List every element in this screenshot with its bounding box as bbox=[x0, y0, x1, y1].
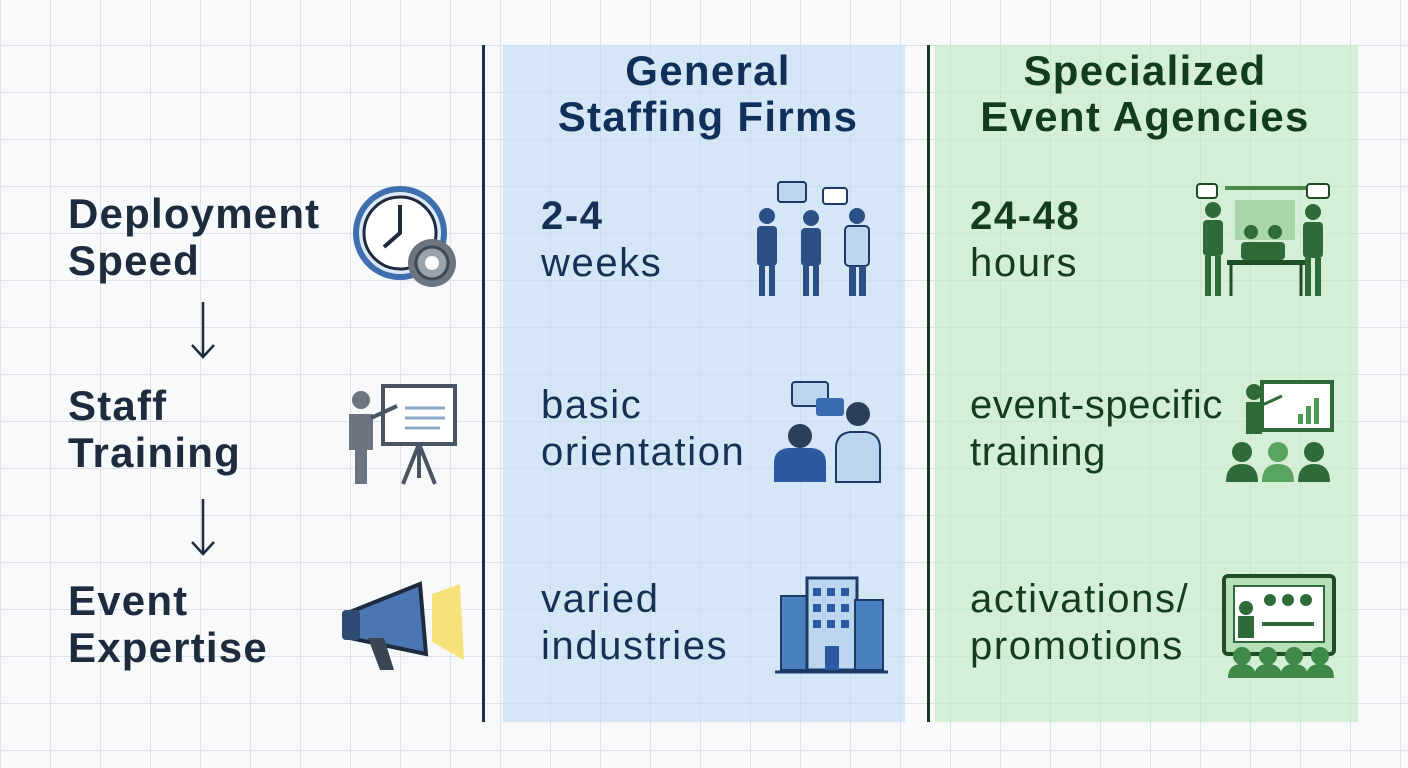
value: varied industries bbox=[541, 577, 728, 668]
icon: training presentation bbox=[1226, 380, 1334, 482]
panel: specialized agencies bbox=[935, 45, 1358, 722]
arrow 1 bbox=[191, 302, 215, 359]
value: 2-4 weeks: 2-4 bbox=[541, 194, 604, 238]
label: staff training: Training bbox=[68, 429, 241, 476]
value: activations/promotions bbox=[970, 577, 1189, 668]
value: varied industries: industries bbox=[541, 624, 728, 668]
value: basic orientation bbox=[541, 383, 745, 474]
icon: orientation conversation bbox=[774, 381, 881, 483]
heading: general staffing firms: Staffing Firms bbox=[558, 93, 858, 140]
value: 2-4 weeks bbox=[541, 194, 662, 285]
value: 24-48 hours: hours bbox=[970, 241, 1078, 285]
value: activations/promotions: promotions bbox=[970, 624, 1184, 668]
label: event expertise: Expertise bbox=[68, 624, 268, 671]
label: staff training: Staff bbox=[68, 382, 167, 429]
icon: office building bbox=[775, 576, 888, 674]
heading: specialized event agencies bbox=[980, 47, 1310, 140]
icon: megaphone bbox=[342, 581, 464, 670]
divider green bbox=[927, 45, 930, 722]
icon: team discussion bbox=[757, 181, 870, 296]
value: activations/promotions: activations/ bbox=[970, 577, 1189, 621]
panel: general staffing bbox=[503, 45, 905, 722]
value: 24-48 hours bbox=[970, 194, 1080, 285]
icon: clock with gear bbox=[353, 186, 456, 287]
heading: specialized event agencies: Event Agencies bbox=[980, 93, 1310, 140]
label: staff training bbox=[68, 382, 241, 476]
label: deployment speed: Deployment bbox=[68, 190, 320, 237]
icon: activation audience bbox=[1222, 574, 1336, 678]
value: 24-48 hours: 24-48 bbox=[970, 194, 1080, 238]
value: event-specific training bbox=[970, 383, 1223, 474]
label: deployment speed: Speed bbox=[68, 237, 200, 284]
heading: specialized event agencies: Specialized bbox=[1023, 47, 1267, 94]
value: event-specific training: training bbox=[970, 430, 1106, 474]
icon: event team at work bbox=[1196, 183, 1330, 296]
heading: general staffing firms bbox=[558, 47, 858, 140]
value: basic orientation: orientation bbox=[541, 430, 745, 474]
value: event-specific training: event-specific bbox=[970, 383, 1223, 427]
icon: presenter with easel bbox=[349, 384, 457, 485]
value: basic orientation: basic bbox=[541, 383, 642, 427]
label: event expertise: Event bbox=[68, 577, 188, 624]
label: event expertise bbox=[68, 577, 268, 671]
label: deployment speed bbox=[68, 190, 320, 284]
heading: general staffing firms: General bbox=[625, 47, 791, 94]
divider navy bbox=[482, 45, 485, 722]
arrow 2 bbox=[191, 499, 215, 556]
value: 2-4 weeks: weeks bbox=[541, 241, 662, 285]
value: varied industries: varied bbox=[541, 577, 660, 621]
